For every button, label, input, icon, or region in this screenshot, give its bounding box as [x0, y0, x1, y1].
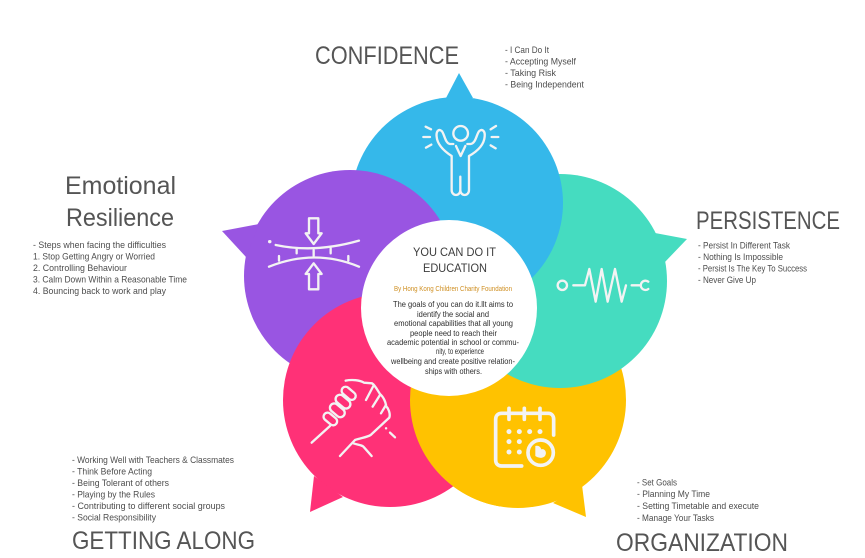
centre circle: [361, 220, 537, 396]
centre text: The goals of you can do it.llt aims to: [393, 300, 514, 309]
centre text: emotional capabilities that all young: [394, 319, 513, 328]
list: persistence: - Persist In Different Task: [698, 240, 790, 252]
yellow overlap on pink: [410, 382, 500, 506]
list: getting along: - Working Well with Teachers & Classmates: [72, 455, 234, 466]
list: organization: - Planning My Time: [637, 489, 710, 500]
list: organization: [637, 478, 759, 524]
icon: resistor wave: [558, 269, 648, 302]
list: confidence: - Accepting Myself: [505, 56, 576, 68]
list: getting along: - Playing by the Rules: [72, 490, 155, 500]
list: emotional resilience: [33, 240, 187, 297]
centre text: ships with others.: [425, 367, 482, 376]
centre text: academic potential in school or commu-: [387, 338, 519, 347]
heading: organization: ORGANIZATION: [616, 529, 788, 557]
heading: emotional resilience: [65, 172, 176, 232]
list: persistence: - Never Give Up: [698, 275, 756, 286]
list: getting along: - Being Tolerant of others: [72, 478, 169, 489]
centre text: By Hong Kong Children Charity Foundation: [394, 284, 512, 293]
list: confidence: - Being Independent: [505, 80, 584, 90]
petal: getting along (pink): [283, 293, 497, 512]
list: emotional resilience: 2. Controlling Behaviour: [33, 263, 127, 274]
list: organization: - Set Goals: [637, 478, 677, 488]
list: emotional resilience: 3. Calm Down Within a Reasonable Time: [33, 274, 187, 286]
petal: confidence (blue): [351, 73, 563, 309]
list: emotional resilience: - Steps when facing the difficulties: [33, 240, 166, 251]
petal: organization (yellow): [410, 292, 626, 517]
heading: getting along: GETTING ALONG: [72, 527, 255, 555]
centre text: YOU CAN DO IT: [413, 245, 497, 259]
icon: calendar with clock: [496, 408, 554, 466]
icon: arm wrestle hands: [312, 380, 395, 456]
centre text: EDUCATION: [423, 261, 487, 275]
list: getting along: - Social Responsibility: [72, 512, 156, 524]
heading: emotional resilience: Resilience: [66, 204, 174, 232]
list: getting along: - Contributing to different social groups: [72, 501, 225, 512]
list: getting along: [72, 455, 234, 524]
centre text: [387, 245, 519, 376]
list: confidence: - I Can Do It: [505, 45, 549, 56]
list: organization: - Setting Timetable and execute: [637, 501, 759, 512]
list: emotional resilience: 1. Stop Getting Angry or Worried: [33, 252, 155, 262]
icon: person with raised arms: [423, 126, 498, 195]
list: persistence: - Nothing Is Impossible: [698, 252, 783, 263]
list: persistence: [698, 240, 807, 286]
heading: confidence: CONFIDENCE: [315, 42, 459, 70]
list: persistence: - Persist Is The Key To Success: [698, 264, 807, 274]
petal: emotional resilience (purple): [222, 170, 456, 382]
list: emotional resilience: 4. Bouncing back to work and play: [33, 286, 166, 297]
petal: persistence (teal): [453, 174, 687, 388]
centre text: wellbeing and create positive relation-: [390, 357, 515, 366]
list: confidence: - Taking Risk: [505, 68, 556, 79]
centre text: people need to reach their: [410, 329, 497, 338]
heading: emotional resilience: Emotional: [65, 172, 176, 200]
list: confidence: [505, 45, 584, 90]
centre text: nity, to experience: [436, 347, 484, 356]
list: organization: - Manage Your Tasks: [637, 513, 714, 524]
list: getting along: - Think Before Acting: [72, 466, 152, 478]
centre text: identify the social and: [417, 310, 489, 319]
icon: pressure arrows and curved bands: [269, 218, 359, 289]
